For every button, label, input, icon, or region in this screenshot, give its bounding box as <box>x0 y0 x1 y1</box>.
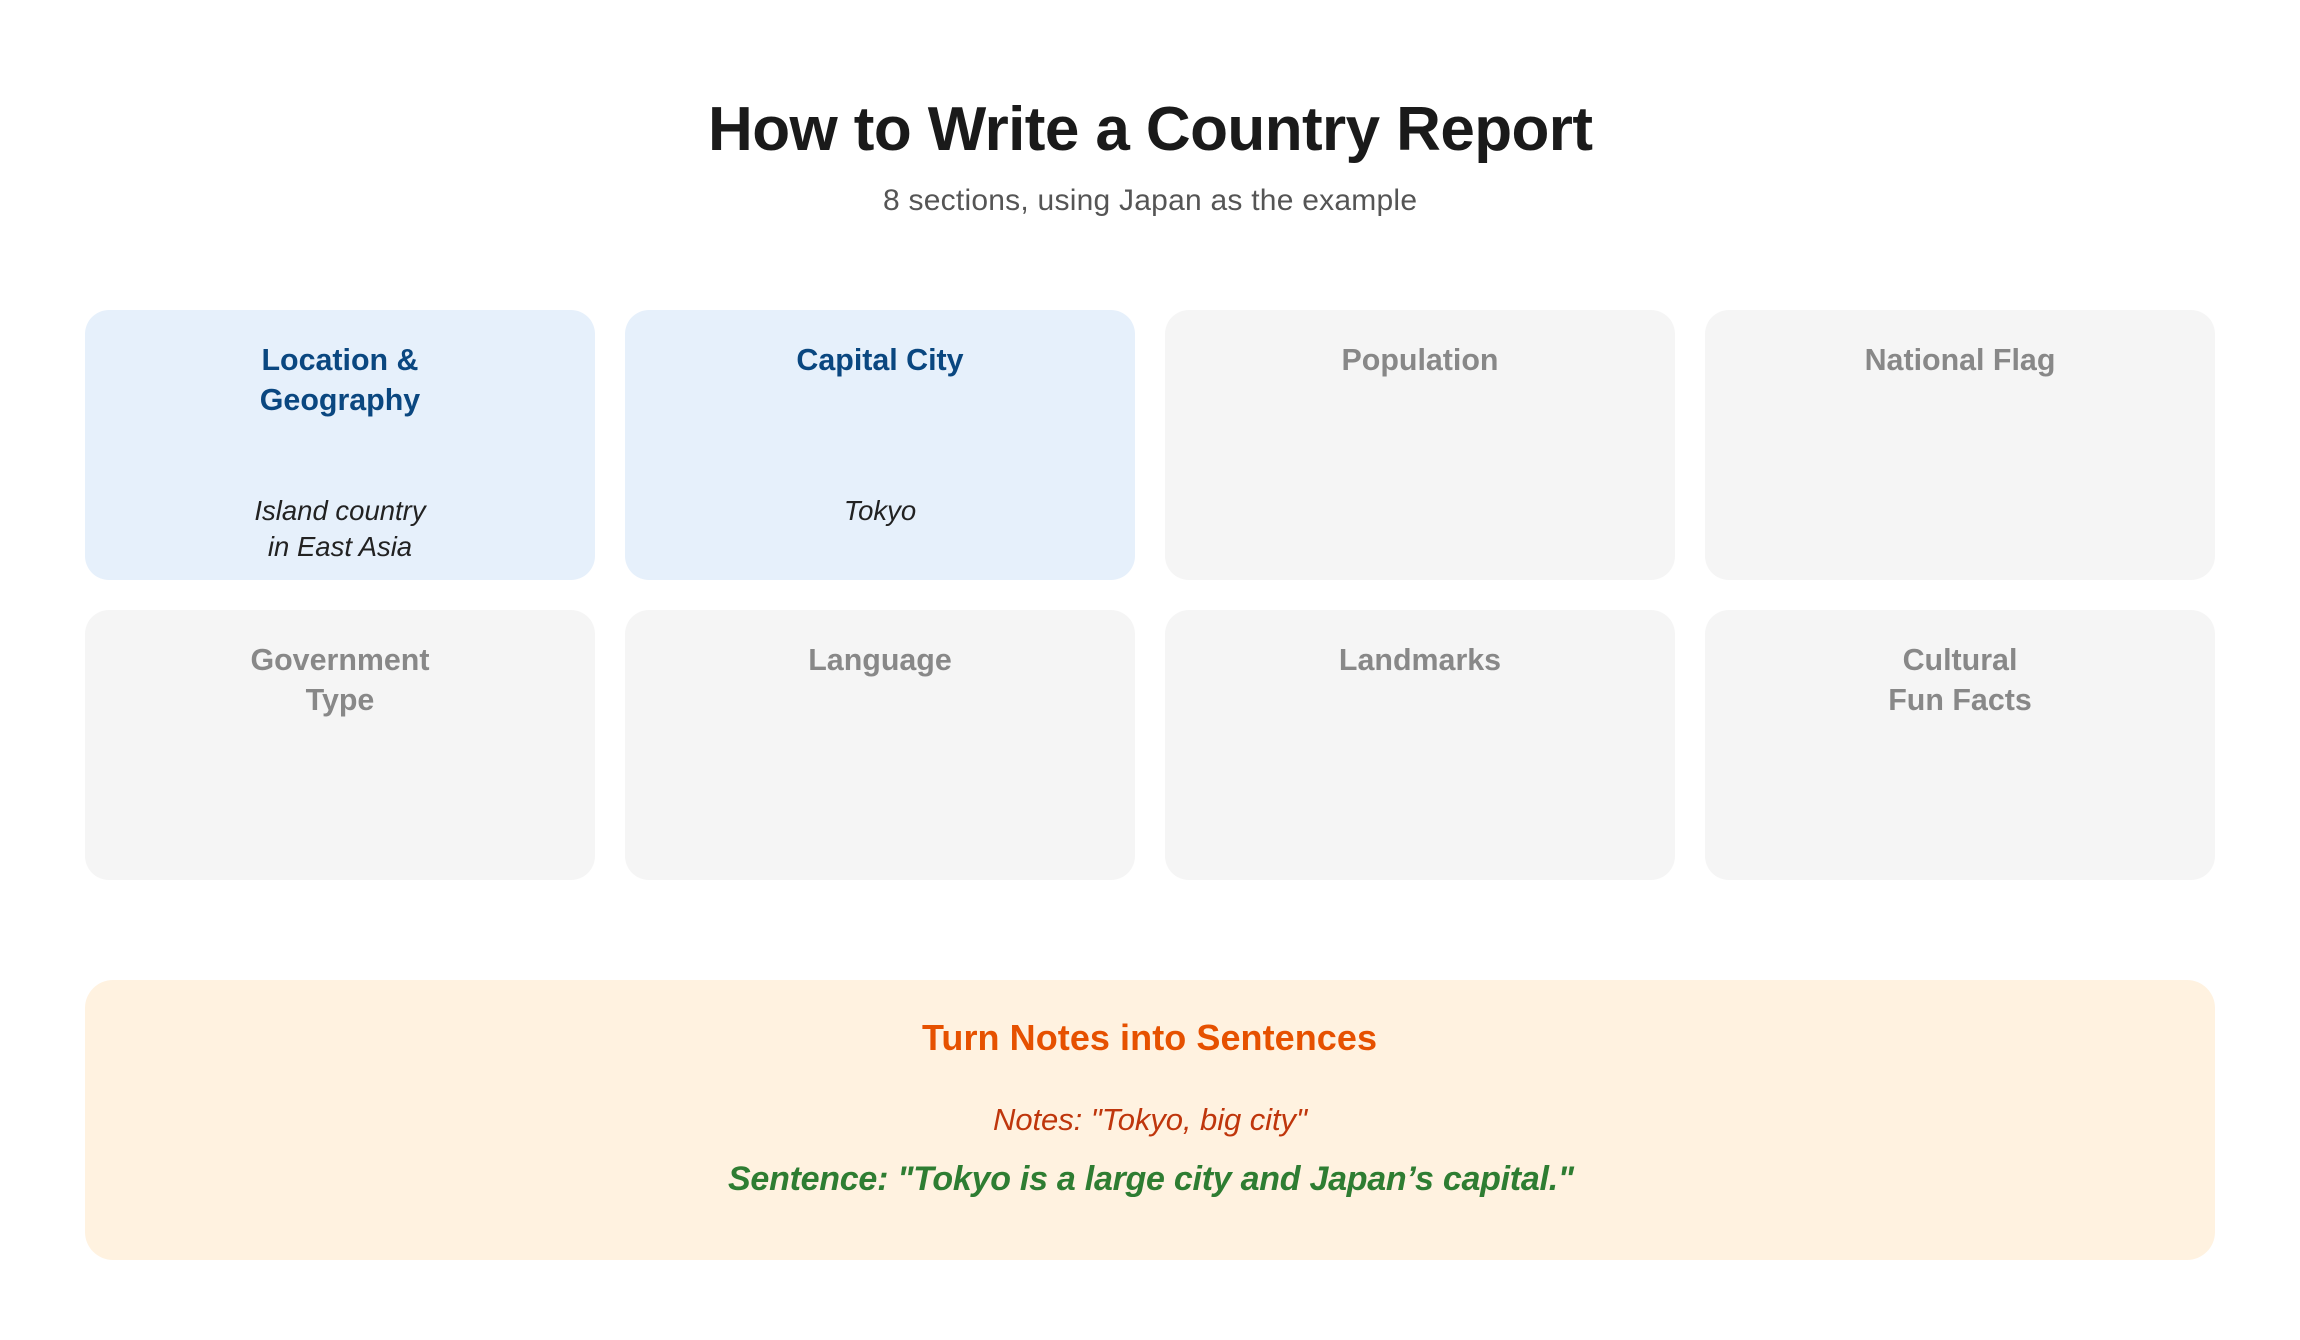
panel: national flag <box>1705 310 2215 580</box>
heading: location and geography: Geography <box>260 383 420 417</box>
panel: turn notes into sentences <box>85 980 2215 1260</box>
example sentence: Sentence: "Tokyo is a large city and Japan’s capital." <box>728 1160 1575 1198</box>
panel: population <box>1165 310 1675 580</box>
title: How to Write a Country Report <box>708 95 1593 164</box>
panel: capital city <box>625 310 1135 580</box>
heading: cultural fun facts: Fun Facts <box>1888 683 2032 717</box>
heading: location and geography: Location & <box>261 343 419 377</box>
heading: turn notes into sentences: Turn Notes into Sentences <box>922 1017 1377 1058</box>
heading: landmarks: Landmarks <box>1339 643 1501 677</box>
panel: government type <box>85 610 595 880</box>
heading: language: Language <box>808 643 952 677</box>
heading: national flag: National Flag <box>1865 343 2055 377</box>
heading: government type: Type <box>306 683 374 717</box>
example notes: Notes: "Tokyo, big city" <box>993 1102 1309 1137</box>
panel: language <box>625 610 1135 880</box>
heading: population: Population <box>1342 343 1498 377</box>
heading: cultural fun facts: Cultural <box>1903 643 2017 677</box>
panel: cultural fun facts <box>1705 610 2215 880</box>
panel: landmarks <box>1165 610 1675 880</box>
note: island country: in East Asia <box>268 531 412 562</box>
heading: capital city: Capital City <box>796 343 964 377</box>
note: Tokyo: Tokyo <box>844 495 916 526</box>
subtitle: 8 sections, using Japan as the example <box>883 184 1417 217</box>
heading: government type: Government <box>250 643 430 677</box>
panel: location and geography <box>85 310 595 580</box>
note: island country: Island country <box>254 495 428 526</box>
